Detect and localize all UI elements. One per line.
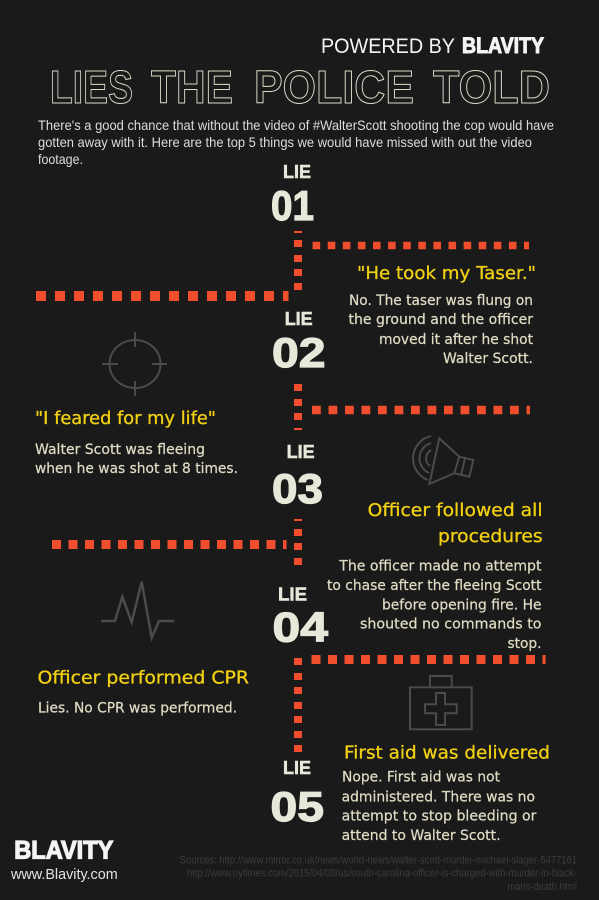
footer logo and url: www.Blavity.com [10, 866, 118, 883]
intro text [38, 117, 554, 167]
lie 1: he took my taser [348, 263, 536, 367]
lie 2: feared for my life: "I feared for my life" [35, 408, 216, 429]
sources [180, 854, 577, 893]
timeline connector 1 [36, 231, 529, 296]
powered by Blavity header: BLAVITY [462, 33, 544, 58]
lie 05 label: LIE [283, 757, 311, 778]
lie 3: followed procedures: to chase after the fleeing Scott [327, 578, 542, 594]
footer logo and url [10, 836, 118, 883]
lie 4: performed CPR [38, 667, 249, 717]
lie 5: first aid: Nope. First aid was not [342, 770, 501, 786]
lie 2: feared for my life: Walter Scott was fleeing [35, 442, 205, 458]
lie 02 label: LIE [285, 308, 313, 329]
icon: megaphone [413, 436, 473, 484]
lie 02 label [272, 308, 326, 376]
lie 05 label [270, 757, 324, 830]
intro text: gotten away with it. Here are the top 5 things we would have missed with out the video [38, 134, 532, 150]
lie 3: followed procedures: stop. [508, 636, 542, 652]
title: POLICE [254, 61, 414, 113]
icon: first aid kit [410, 676, 472, 729]
intro text: footage. [38, 151, 83, 167]
icon: crosshair [102, 332, 167, 396]
lie 3: followed procedures: before opening fire. He [382, 597, 542, 613]
lie 2: feared for my life [35, 408, 238, 477]
lie 03 label: LIE [287, 441, 315, 462]
lie 5: first aid: administered. There was no [342, 789, 535, 805]
title [50, 61, 550, 113]
lie 03 label [272, 441, 323, 512]
lie 3: followed procedures [327, 500, 543, 652]
lie 5: first aid: First aid was delivered [344, 742, 550, 763]
lie 5: first aid: attempt to stop bleeding or [342, 809, 537, 825]
lie 04 label [272, 584, 329, 651]
timeline connector 2 [294, 384, 530, 430]
lie 01 label [271, 161, 314, 229]
timeline connector 4 [294, 658, 546, 752]
intro text: There's a good chance that without the video of #WalterScott shooting the cop would have [38, 117, 554, 133]
sources: mans-death.html [508, 881, 577, 893]
lie 01 label: 01 [271, 182, 314, 229]
lie 3: followed procedures: shouted no commands to [360, 617, 542, 633]
lie 1: he took my taser: moved it after he shot [379, 332, 534, 348]
lie 3: followed procedures: procedures [438, 526, 543, 547]
lie 1: he took my taser: Walter Scott. [443, 351, 533, 367]
lie 01 label: LIE [283, 161, 311, 182]
lie 1: he took my taser: "He took my Taser." [357, 263, 536, 284]
powered by Blavity header [321, 33, 544, 58]
lie 1: he took my taser: the ground and the officer [348, 312, 533, 328]
title: THE [151, 61, 233, 113]
lie 5: first aid [342, 742, 550, 844]
lie 04 label: LIE [278, 584, 307, 605]
title: TOLD [433, 61, 550, 113]
timeline connector 3 [52, 519, 302, 565]
footer logo and url: BLAVITY [14, 836, 114, 864]
lie 03 label: 03 [272, 465, 323, 512]
title: LIES [50, 61, 133, 113]
lie 3: followed procedures: The officer made no attempt [338, 558, 542, 574]
lie 3: followed procedures: Officer followed all [368, 500, 543, 521]
lie 4: performed CPR: Lies. No CPR was performed. [38, 701, 237, 717]
lie 04 label: 04 [272, 604, 329, 651]
lie 1: he took my taser: No. The taser was flung on [349, 293, 533, 309]
lie 2: feared for my life: when he was shot at 8 times. [35, 461, 238, 477]
lie 5: first aid: attend to Walter Scott. [342, 828, 501, 844]
lie 4: performed CPR: Officer performed CPR [38, 667, 249, 688]
lie 05 label: 05 [270, 783, 324, 830]
powered by Blavity header: POWERED BY [321, 35, 455, 58]
lie 02 label: 02 [272, 329, 326, 376]
icon: pulse line [101, 582, 174, 638]
